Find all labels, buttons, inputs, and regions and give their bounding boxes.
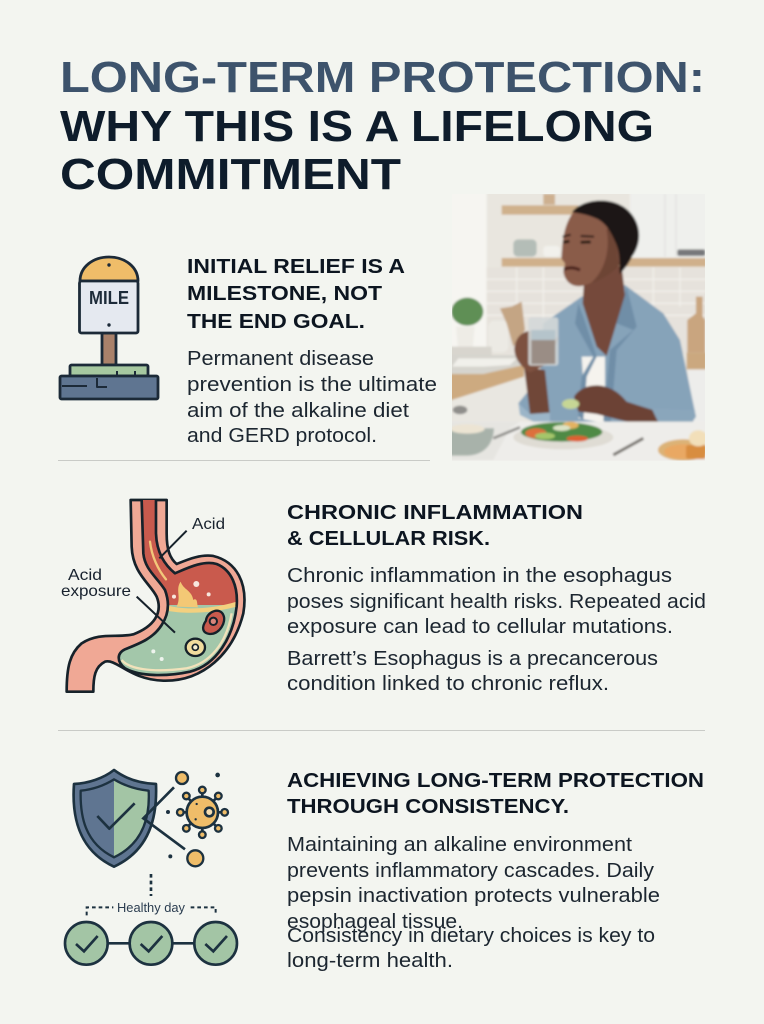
plant [451,298,483,326]
shelves [502,205,578,215]
day checks [107,939,193,947]
particles [176,772,188,784]
heading: initial relief: MILESTONE, NOT [187,283,382,305]
title: WHY THIS IS A LIFELONG [60,102,654,151]
text block: chronic inflammation body: Chronic inflammation in the esophagus [287,565,672,587]
cutting board right [687,297,705,353]
text block: initial relief body: aim of the alkaline diet [187,400,409,422]
text block: initial relief body: prevention is the ultimate [187,374,437,396]
salad plate [514,430,614,450]
lower arm and hand [573,384,658,423]
grass [70,365,148,376]
base [60,376,158,399]
text block: initial relief body: Permanent disease [187,348,374,370]
text block: chronic inflammation body: exposure can lead to cellular mutations. [287,616,673,638]
icon: milestone marker [60,257,158,399]
heading: long-term protection [287,770,704,818]
text block: long-term protection body: long-term health. [287,950,453,972]
marker plate [80,281,138,333]
text block: long-term protection body: esophageal tissue. [287,911,463,933]
label: healthy day: Healthy day [117,900,185,915]
shirt [518,285,696,435]
panel: achieving long-term protection [287,770,704,972]
text block: long-term protection body: Consistency in dietary choices is key to [287,925,655,947]
heading: chronic inflammation: & CELLULAR RISK. [287,528,490,550]
post [102,333,116,365]
label: acid: Acid [192,516,225,533]
panel: initial relief [187,256,437,447]
title: COMMITMENT [60,150,401,199]
text block: long-term protection body [287,834,660,972]
text block: long-term protection body: prevents inflammatory cascades. Daily [287,860,654,882]
icon: stomach with acid reflux [67,497,244,692]
heading: initial relief [187,256,405,333]
heading: chronic inflammation: CHRONIC INFLAMMATION [287,502,583,524]
virus [177,787,228,838]
hair [572,200,639,274]
dotted connector [147,874,155,896]
title: LONG-TERM PROTECTION: [60,53,705,102]
arm holding glass [524,367,550,417]
cell [186,639,205,656]
infographic canvas [58,62,705,971]
milestone label: MILE [89,288,129,308]
stomach lumen [120,500,236,674]
table [493,420,705,460]
marker dome [80,257,138,281]
acid droplets [193,581,199,587]
heading: initial relief: THE END GOAL. [187,311,365,333]
photo: woman drinking water at kitchen table [450,190,710,467]
icon: shield, virus and healthy days [65,770,237,965]
face [560,210,610,288]
shield [74,770,156,867]
text block: long-term protection body: pepsin inactivation protects vulnerable [287,885,660,907]
text block: chronic inflammation body: condition linked to chronic reflux. [287,673,609,695]
sink and counter [452,346,492,355]
heading: long-term protection: THROUGH CONSISTENCY. [287,796,569,818]
bowl [450,428,494,456]
label: acid exposure: Acid [68,567,102,584]
text block: initial relief body: and GERD protocol. [187,425,377,447]
lesion [203,611,224,634]
fork [613,438,643,455]
panel: chronic inflammation [287,502,706,695]
text block: initial relief body [187,348,437,447]
neck [583,265,625,356]
bread [658,439,709,461]
glass [528,317,558,366]
text block: chronic inflammation body: poses significant health risks. Repeated acid [287,591,706,613]
leader lines [137,531,187,633]
heading: chronic inflammation [287,502,583,550]
title [60,53,705,199]
text block: chronic inflammation body: Barrett’s Esophagus is a precancerous [287,648,658,670]
label: acid exposure: exposure [61,583,131,600]
text block: chronic inflammation body [287,565,706,695]
text block: long-term protection body: Maintaining an alkaline environment [287,834,632,856]
stomach wall [67,500,244,692]
heading: initial relief: INITIAL RELIEF IS A [187,256,405,278]
label: acid exposure [61,567,131,600]
heading: long-term protection: ACHIEVING LONG-TERM PROTECTION [287,770,704,792]
